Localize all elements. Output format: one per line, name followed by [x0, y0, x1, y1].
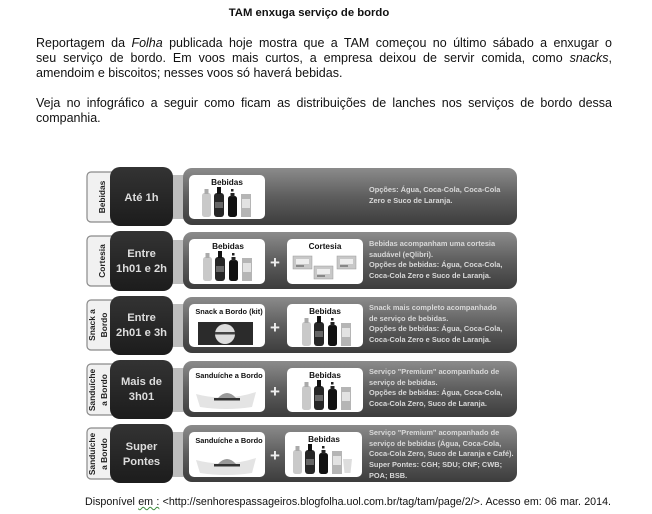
tab label: Sanduíche a Bordo [87, 428, 123, 479]
tab label: Sanduíche a Bordo: a Bordo [99, 374, 109, 406]
description: serviço de bebidas. [369, 378, 438, 387]
tab label: Bebidas: Bebidas [97, 180, 107, 213]
time box: Super Pontes [110, 424, 173, 483]
panel [183, 361, 517, 417]
text block: intro paragraph: Reportagem da Folha publicada hoje mostra que a TAM começou no último sábado a enxugar o [36, 36, 612, 50]
time box: Entre 1h01 e 2h: 1h01 e 2h [116, 263, 167, 275]
text block: second paragraph: Veja no infográfico a seguir como ficam as distribuições de lanches nos serviços de bordo dessa [36, 96, 612, 110]
time box: Até 1h [110, 167, 173, 226]
card: Bebidas [285, 432, 362, 477]
row: Sanduíche a Bordo / Mais de 3h01 [87, 360, 517, 419]
description: Opções: Água, Coca-Cola, Coca-Cola [369, 185, 501, 194]
plus: + [270, 382, 280, 401]
row: Cortesia / Entre 1h01 e 2h [87, 231, 517, 291]
row: Sanduíche a Bordo / Super Pontes [87, 424, 517, 483]
time box: Até 1h: Até 1h [124, 192, 159, 204]
tab label: Sanduíche a Bordo [87, 364, 123, 415]
panel [183, 168, 517, 225]
time box: Entre 2h01 e 3h: 2h01 e 3h [116, 327, 167, 339]
plus: + [270, 253, 280, 272]
card: Cortesia: Cortesia [309, 242, 342, 251]
time box: Entre 1h01 e 2h: Entre [127, 248, 156, 260]
card: Sanduíche a Bordo [189, 368, 265, 412]
source note: Disponível em : <http://senhorespassageiros.blogfolha.uol.com.br/tag/tam/page/2/>. Acesso em: 06 mar. 2014. [85, 496, 611, 508]
tab label: Snack a Bordo [87, 300, 123, 350]
text block: intro paragraph [36, 36, 612, 80]
card: Bebidas [189, 239, 265, 284]
description: Serviço "Premium" acompanhado de [369, 428, 499, 437]
tab label: Snack a Bordo: Bordo [99, 313, 109, 337]
description: serviço de bebidas (Água, Coca-Cola, [369, 439, 501, 448]
description: Serviço "Premium" acompanhado de [369, 367, 499, 376]
description: POA; BSB. [369, 471, 407, 480]
description: Snack mais completo acompanhado [369, 303, 497, 312]
time box: Mais de 3h01: Mais de [121, 376, 162, 388]
text block: intro paragraph: seu serviço de bordo. Em voos mais curtos, a empresa deixou de servir comida, como snacks, [36, 51, 612, 65]
plus: + [270, 318, 280, 337]
description: saudável (eQlibri). [369, 250, 433, 259]
description: Coca-Cola Zero e Suco de Laranja. [369, 271, 491, 280]
description: Bebidas acompanham uma cortesia [369, 239, 496, 248]
time box: Super Pontes: Super [126, 441, 158, 453]
card: Cortesia [287, 239, 363, 284]
row: Snack a Bordo / Entre 2h01 e 3h [87, 296, 517, 355]
card: Sanduíche a Bordo [189, 432, 265, 477]
panel [183, 425, 517, 482]
time box: Mais de 3h01: 3h01 [129, 391, 154, 403]
panel [183, 232, 517, 289]
description: Opções de bebidas: Água, Coca-Cola, [369, 324, 502, 333]
text block: second paragraph [36, 96, 612, 125]
description: Opções de bebidas: Água, Coca-Cola, [369, 388, 502, 397]
title: TAM enxuga serviço de bordo [229, 7, 389, 19]
time box: Entre 2h01 e 3h [110, 296, 173, 355]
time box: Mais de 3h01 [110, 360, 173, 419]
description: Super Pontes: CGH; SDU; CNF; CWB; [369, 460, 502, 469]
description: de serviço de bebidas. [369, 314, 448, 323]
time box: Entre 2h01 e 3h: Entre [127, 312, 156, 324]
card: Sanduíche a Bordo: Sanduíche a Bordo [195, 371, 263, 380]
card: Snack a Bordo (kit): Snack a Bordo (kit) [195, 307, 263, 316]
tab label: Cortesia: Cortesia [97, 244, 107, 278]
description: Coca-Cola Zero, Suco de Laranja e Café). [369, 449, 514, 458]
tab label: Bebidas [87, 172, 123, 222]
card: Bebidas [189, 175, 265, 219]
card: Bebidas: Bebidas [308, 435, 340, 444]
description: Opções de bebidas: Água, Coca-Cola, [369, 260, 502, 269]
plus: + [270, 446, 280, 465]
card: Bebidas: Bebidas [212, 242, 244, 251]
description: Coca-Cola Zero e Suco de Laranja. [369, 335, 491, 344]
card: Bebidas [287, 368, 363, 412]
tab label: Snack a Bordo: Snack a [87, 309, 97, 341]
row: Bebidas / Até 1h [87, 167, 517, 226]
time box: Entre 1h01 e 2h [110, 231, 173, 291]
text block: second paragraph: companhia. [36, 111, 101, 125]
tab label: Sanduíche a Bordo: Sanduíche [87, 432, 97, 475]
card: Bebidas: Bebidas [211, 178, 243, 187]
time box: Super Pontes: Pontes [123, 456, 160, 468]
tab label: Cortesia [87, 236, 123, 286]
tab label: Sanduíche a Bordo: a Bordo [99, 438, 109, 470]
description: Coca-Cola Zero, Suco de Laranja. [369, 399, 487, 408]
card: Sanduíche a Bordo: Sanduíche a Bordo [195, 436, 263, 445]
tab label: Sanduíche a Bordo: Sanduíche [87, 368, 97, 411]
text block: intro paragraph: amendoim e biscoitos; nesses voos só haverá bebidas. [36, 66, 342, 80]
card: Bebidas [287, 304, 363, 347]
card: Snack a Bordo (kit) [189, 304, 265, 347]
panel [183, 297, 517, 353]
card: Bebidas: Bebidas [309, 371, 341, 380]
card: Bebidas: Bebidas [309, 307, 341, 316]
description: Zero e Suco de Laranja. [369, 196, 452, 205]
